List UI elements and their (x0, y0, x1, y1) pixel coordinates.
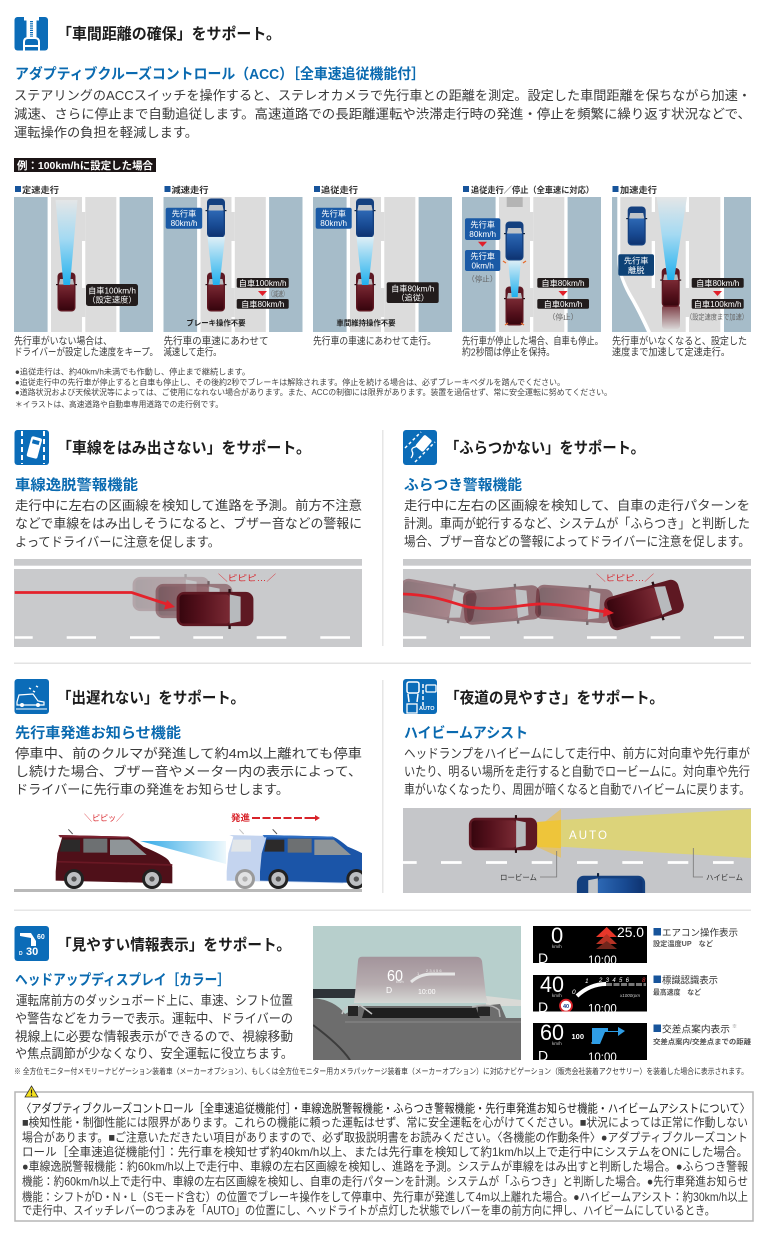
subtitle: ふらつき警報機能 (404, 476, 523, 494)
label: air conditioning display: 設定温度UP など (653, 939, 713, 948)
icon: high beam (403, 679, 437, 714)
subtitle: ACC: アダプティブクルーズコントロール（ACC）［全車速追従機能付］ (15, 65, 425, 83)
screen: sign recognition display: 40 (540, 972, 564, 997)
car: departing lane (177, 589, 253, 629)
photo: head-up display on dashboard: km/h (396, 980, 404, 984)
text block: 走行中に左右の区画線を検知して進路を予測。前方不注意 (15, 498, 362, 513)
road scene: 自車100km/h (694, 299, 742, 309)
caption: 先行車の車速にあわせて (164, 334, 268, 348)
text block: warning details: ロール［全車速追従機能付］：先行車を検知せず約40km/h以上、または先行車を検知して約1km/h以上で走行中にシステムをONにした場合。 (22, 1145, 748, 1159)
road scene: 先行車 (470, 251, 495, 261)
road scene (164, 197, 302, 332)
warning box (15, 1086, 753, 1221)
text block: よってドライバーに注意を促します。 (15, 534, 220, 550)
section: sway warning (396, 430, 751, 647)
road scene: 80km/h (171, 219, 198, 228)
icon: following distance (14, 17, 48, 50)
photo: head-up display on dashboard: D (386, 985, 392, 995)
label: high beam: ハイビーム (706, 873, 743, 882)
photo: head-up display on dashboard: 10:00 (418, 989, 436, 996)
road scene: 80km/h (469, 230, 497, 239)
caption: 先行車が停止した場合、自車も停止。 (462, 334, 603, 348)
photo: head-up display on dashboard: 2 3 4 5 6 (426, 968, 442, 973)
subtitle: 車線逸脱警報機能 (15, 476, 139, 494)
road scene: 80km/h (320, 219, 348, 228)
arrow: predicted path (15, 592, 175, 610)
panel label: 加速走行 (620, 184, 657, 195)
caption: 減速して走行。 (164, 346, 222, 358)
screen: air conditioning display: 10:00 (588, 955, 617, 967)
road scene: 離脱 (628, 265, 644, 275)
screen: sign recognition display: 1 (585, 978, 589, 985)
screen: intersection guidance display: m (591, 1040, 595, 1045)
icon: sway (403, 430, 437, 465)
screen: air conditioning display (533, 926, 647, 963)
icon: HUD: 60 (37, 934, 45, 941)
road scene: （設定速度） (87, 294, 137, 304)
screen: sign recognition display: 40 (563, 1004, 569, 1010)
car: ghost of preceding vehicle (227, 829, 343, 889)
road scene: 自車80km/h (696, 278, 740, 288)
text block: 停車中、前のクルマが発進して約4m以上離れても停車 (15, 746, 362, 761)
text block: などで車線をはみ出しそうになると、ブザー音などの警報に (15, 516, 362, 531)
heading: 「車線をはみ出さない」をサポート。 (57, 438, 311, 457)
screen: intersection guidance display: 10:00 (588, 1052, 617, 1064)
road scene: 先行車 (470, 220, 495, 230)
swaying cars (403, 578, 613, 625)
subtitle: 先行車発進お知らせ機能 (15, 724, 182, 742)
heading: 「ふらつかない」をサポート。 (445, 439, 645, 457)
road scene: 自車0km/h (544, 299, 583, 309)
sensor beam (140, 841, 226, 864)
beam: low beam (537, 809, 561, 858)
road scene: （設定速度まで加速） (686, 312, 748, 322)
screen: air conditioning display: D (538, 950, 548, 966)
section: head-up display (14, 923, 751, 1064)
screen: air conditioning display: 0 (551, 923, 563, 948)
notes: ACC conditions: ●道路状況および天候状況等によっては、ご使用になれない場合があります。また、ACCの制御には限界があります。装置を過信せず、常に安全運転に努めてください。 (15, 387, 612, 397)
caption: 先行車の車速にあわせて走行。 (313, 334, 436, 348)
road scene: 自車100km/h (239, 278, 287, 288)
label: sign recognition display (653, 974, 718, 996)
text block: し続けた場合、ブザー音やメーター内の表示によって、 (15, 764, 362, 779)
label: air conditioning display (653, 927, 738, 948)
panel label (612, 184, 657, 195)
panel label: 定速走行 (22, 184, 59, 195)
text block (404, 746, 750, 797)
road scene: （追従） (396, 292, 429, 302)
label: intersection guidance display (653, 1024, 751, 1046)
caption (612, 334, 747, 358)
section: vehicle distance support (ACC) (14, 17, 751, 172)
section: high beam assist (403, 679, 751, 911)
text block: warning details (21, 1102, 750, 1218)
panel label: 追従走行 (321, 184, 358, 195)
road illustration (403, 808, 751, 893)
text block (15, 498, 362, 550)
notes: ACC conditions (15, 366, 612, 409)
heading: 「出遅れない」をサポート。 (57, 689, 245, 707)
notes: ACC conditions: ●追従走行中の先行車が停止すると自車も停止し、その後約2秒でブレーキは解除されます。停止を続ける場合は、必ずブレーキペダルを踏んでください。 (15, 377, 565, 387)
road scene: 自車80km/h (241, 299, 285, 309)
caption: 先行車がいない場合は、 (14, 334, 112, 348)
screen: intersection guidance display: 100 (572, 1032, 584, 1041)
panel: following and stop (462, 184, 603, 358)
icon: HUD: 30 (26, 946, 38, 958)
text block: や焦点調節が少なくなり、安全運転に役立ちます。 (15, 1046, 293, 1061)
road scene (14, 197, 153, 332)
label: low beam (500, 851, 557, 882)
screen: sign recognition display (533, 975, 647, 1012)
photo: head-up display on dashboard (313, 926, 521, 1060)
subtitle: ハイビームアシスト (404, 724, 528, 742)
screen: sign recognition display: 0 (572, 989, 576, 996)
caption: 速度まで加速して定速走行。 (612, 346, 730, 358)
text block: や警告などをカラーで表示。運転中、ドライバーの (15, 1011, 293, 1026)
icon: warning triangle (25, 1086, 38, 1097)
screen: sign recognition display: 10:00 (588, 1004, 617, 1016)
caption: 約2秒間は停止を保持。 (462, 346, 555, 358)
text block: 計測。車両が蛇行するなど、システムが「ふらつき」と判断した (404, 516, 750, 531)
text block (15, 746, 362, 797)
screen: sign recognition display: D (538, 999, 548, 1015)
ghost cars (133, 574, 232, 621)
label: low beam: ロービーム (500, 873, 537, 882)
road scene: 先行車 (624, 256, 648, 266)
notes: ACC conditions: ●追従走行は、約40km/h未満でも作動し、停止まで継続します。 (15, 366, 250, 376)
panel label: 追従走行／停止（全車速に対応） (471, 184, 594, 195)
text block: 運転席前方のダッシュボード上に、車速、シフト位置 (16, 993, 293, 1008)
screen: sign recognition display: 2 3 4 5 6 (598, 978, 630, 984)
car illustration (14, 812, 377, 892)
road line (14, 889, 362, 892)
panel label: 減速走行 (172, 184, 209, 195)
caption (462, 334, 603, 358)
label: intersection guidance display: 交差点案内表示 (662, 1024, 730, 1036)
road scene: ブレーキ操作不要 (186, 318, 246, 328)
section: departure notification (14, 679, 377, 892)
screen: air conditioning display: 25.0 (617, 924, 644, 940)
road scene: 自車100km/h (88, 286, 136, 296)
heading: 「見やすい情報表示」をサポート。 (57, 935, 291, 954)
screen: sign recognition display: km/h (552, 993, 562, 998)
road scene: 自車80km/h (541, 278, 585, 288)
screen: intersection guidance display: km/h (552, 1041, 562, 1046)
example tag: 例：100km/hに設定した場合 (17, 159, 153, 172)
car: own vehicle (469, 815, 537, 853)
text block: 視線上に必要な情報表示ができるので、視線移動 (15, 1029, 293, 1044)
text block: ACC description: 減速、さらに停止まで自動追従します。高速道路での長距離運転や渋滞走行時の発進・停止を頻繁に繰り返す状況などで、 (14, 106, 751, 122)
caption: 先行車がいなくなると、設定した (612, 334, 747, 348)
icon: HUD: D (19, 951, 23, 957)
road scene: （停止） (548, 312, 578, 322)
car: own vehicle side (56, 829, 172, 889)
car: preceding vehicle (260, 829, 362, 889)
road scene: （停止） (467, 274, 497, 284)
label: high beam (693, 848, 743, 882)
label: sign recognition display: 最高速度 など (653, 988, 701, 996)
photo: head-up display on dashboard: 60 (387, 968, 403, 985)
road scene: 0km/h (472, 262, 494, 270)
alert text: ＼ピピピ…／ (218, 573, 276, 583)
road scene: 先行車 (172, 208, 196, 218)
label: intersection guidance display: ※ (732, 1024, 737, 1030)
text block: ACC description: 運転操作の負担を軽減します。 (14, 125, 198, 140)
road scene: 自車80km/h (391, 284, 435, 294)
label: air conditioning display: エアコン操作表示 (662, 927, 738, 939)
alert text: ＼ピピピ…／ (596, 573, 654, 583)
text block: ドライバーに先行車の発進をお知らせします。 (15, 782, 289, 797)
notes: ACC conditions: ＊イラストは、高速道路や自動車専用道路での走行例です。 (15, 399, 223, 409)
panel: constant speed driving (14, 184, 158, 358)
road scene: 車間維持操作不要 (336, 318, 396, 328)
icon: high beam: AUTO (419, 706, 435, 712)
section: lane departure warning (14, 430, 362, 647)
departure arrow (231, 812, 320, 823)
road illustration (396, 559, 751, 647)
caption (164, 334, 268, 358)
screen: sign recognition display: x1000rpm (619, 993, 640, 998)
beam: high beam (561, 809, 751, 858)
car: current position (602, 575, 686, 635)
subtitle: ヘッドアップディスプレイ［カラー］ (15, 971, 230, 989)
road scene (313, 197, 452, 332)
road scene (612, 197, 751, 332)
caption: ドライバーが設定した速度をキープ。 (14, 346, 158, 358)
label: intersection guidance display: 交差点案内/交差点までの距離 (653, 1037, 751, 1046)
screen: intersection guidance display: D (538, 1048, 548, 1064)
panel: following driving (313, 184, 452, 348)
screen: sign recognition display: 8 (642, 978, 646, 984)
road scene (462, 197, 601, 332)
icon: HUD (14, 926, 49, 961)
road illustration (14, 559, 362, 647)
caption (14, 334, 158, 358)
label: sign recognition display: 標識認識表示 (662, 974, 718, 986)
departure arrow: 発進 (231, 812, 250, 823)
heading: 「夜道の見やすさ」をサポート。 (445, 689, 664, 707)
arrow: sway path (403, 594, 614, 617)
panel: deceleration driving (164, 184, 302, 358)
screen: air conditioning display: km/h (552, 944, 562, 949)
icon: departing car (14, 679, 49, 714)
heading: distance support: 「車間距離の確保」をサポート。 (57, 24, 281, 43)
road scene: 先行車 (321, 208, 346, 218)
photo: head-up display on dashboard: 1 (417, 971, 420, 976)
panel: acceleration driving (612, 184, 751, 358)
label: AUTO: AUTO (569, 830, 607, 842)
text block (15, 993, 293, 1061)
text block (404, 498, 750, 549)
screen: intersection guidance display (533, 1023, 647, 1060)
road scene: （減速） (268, 288, 288, 298)
alert text: ＼ピピッ／ (84, 813, 124, 823)
text block: ACC description: ステアリングのACCスイッチを操作すると、ステレオカメラで先行車との距離を測定。設定した車間距離を保ちながら加速・ (14, 88, 751, 103)
car: oncoming vehicle (576, 873, 646, 893)
text block: 走行中に左右の区画線を検知して、自車の走行パターンを (404, 498, 750, 513)
icon: lane departure (14, 430, 49, 465)
text block: ACC description (14, 88, 751, 140)
screen: intersection guidance display: 60 (540, 1020, 564, 1045)
